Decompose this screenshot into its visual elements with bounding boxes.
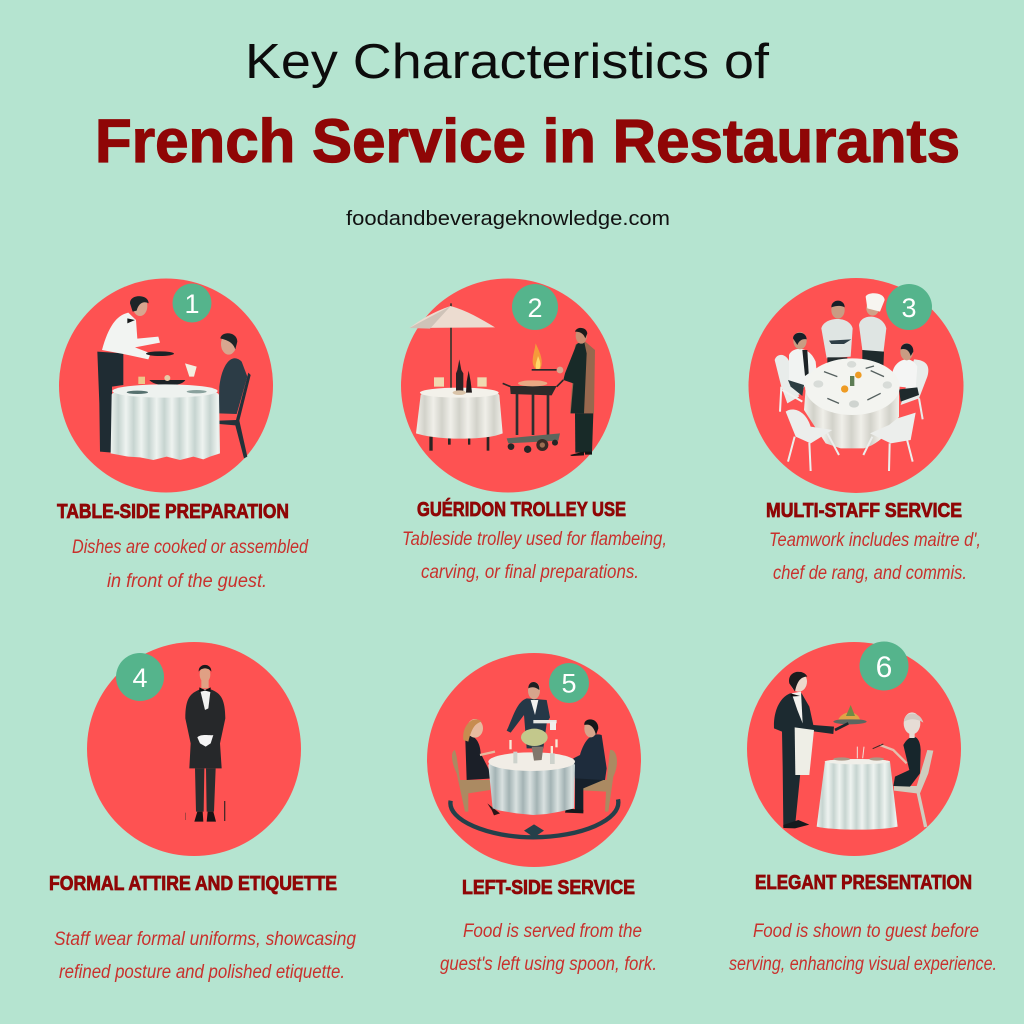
description 3: chef de rang, and commis. (773, 562, 967, 584)
number badge 1 (172, 284, 212, 322)
red circle 3 (748, 278, 964, 493)
description 4: refined posture and polished etiquette. (59, 961, 345, 983)
illustration: umbrella table, trolley and flambeing waiter (409, 303, 595, 456)
heading 4: FORMAL ATTIRE AND ETIQUETTE (49, 872, 337, 895)
website url: foodandbeverageknowledge.com (346, 208, 670, 230)
number badge 2: 2 (527, 293, 543, 323)
red circle 5 (427, 653, 641, 867)
panel 3: multi-staff service (748, 278, 981, 584)
number badge 6 (860, 642, 908, 690)
heading 1: TABLE-SIDE PREPARATION (57, 500, 289, 523)
description 1 (72, 536, 309, 592)
description 4: Staff wear formal uniforms, showcasing (54, 928, 356, 950)
illustration: waiter preparing at table with seated guest (97, 296, 251, 460)
description 5 (440, 920, 657, 975)
title line 1: Key Characteristics of (245, 35, 769, 89)
description 6 (729, 920, 997, 975)
number badge 1: 1 (184, 289, 200, 319)
description 5: guest's left using spoon, fork. (440, 953, 657, 975)
number badge 5: 5 (561, 668, 577, 698)
panel 4: formal attire and etiquette (49, 642, 356, 983)
heading 6: ELEGANT PRESENTATION (755, 871, 972, 894)
illustration: waiter presenting plate to seated guest (774, 672, 933, 830)
panel 2: gueridon trolley use (401, 278, 667, 583)
panel 1: table-side preparation (57, 278, 309, 592)
illustration: waiter serving couple at table (450, 682, 618, 837)
red circle 1 (59, 278, 273, 492)
number badge 6: 6 (876, 651, 892, 684)
title line 2: French Service in Restaurants (95, 107, 960, 175)
description 4 (54, 928, 356, 983)
heading 3: MULTI-STAFF SERVICE (766, 499, 962, 522)
number badge 5 (549, 663, 589, 703)
number badge 4 (116, 653, 164, 701)
description 1: in front of the guest. (107, 570, 267, 592)
description 3 (769, 529, 981, 584)
number badge 3: 3 (901, 293, 917, 323)
number badge 4: 4 (132, 663, 148, 693)
illustration: staff around a round table (775, 293, 928, 471)
number badge 3 (886, 284, 932, 330)
description 5: Food is served from the (463, 920, 642, 942)
description 2 (402, 528, 667, 583)
description 2: Tableside trolley used for flambeing, (402, 528, 667, 550)
description 6: Food is shown to guest before (753, 920, 979, 942)
description 3: Teamwork includes maitre d', (769, 529, 981, 551)
description 1: Dishes are cooked or assembled (72, 536, 309, 558)
red circle 6 (747, 642, 961, 856)
heading 5: LEFT-SIDE SERVICE (462, 876, 635, 899)
red circle 2 (401, 278, 615, 492)
description 2: carving, or final preparations. (421, 561, 639, 583)
illustration: butler in tailcoat (185, 665, 225, 822)
panel 6: elegant presentation (729, 642, 997, 975)
red circle 4 (87, 642, 301, 856)
panel 5: left-side service (427, 653, 657, 975)
number badge 2 (512, 284, 558, 330)
heading 2: GUÉRIDON TROLLEY USE (417, 498, 626, 521)
